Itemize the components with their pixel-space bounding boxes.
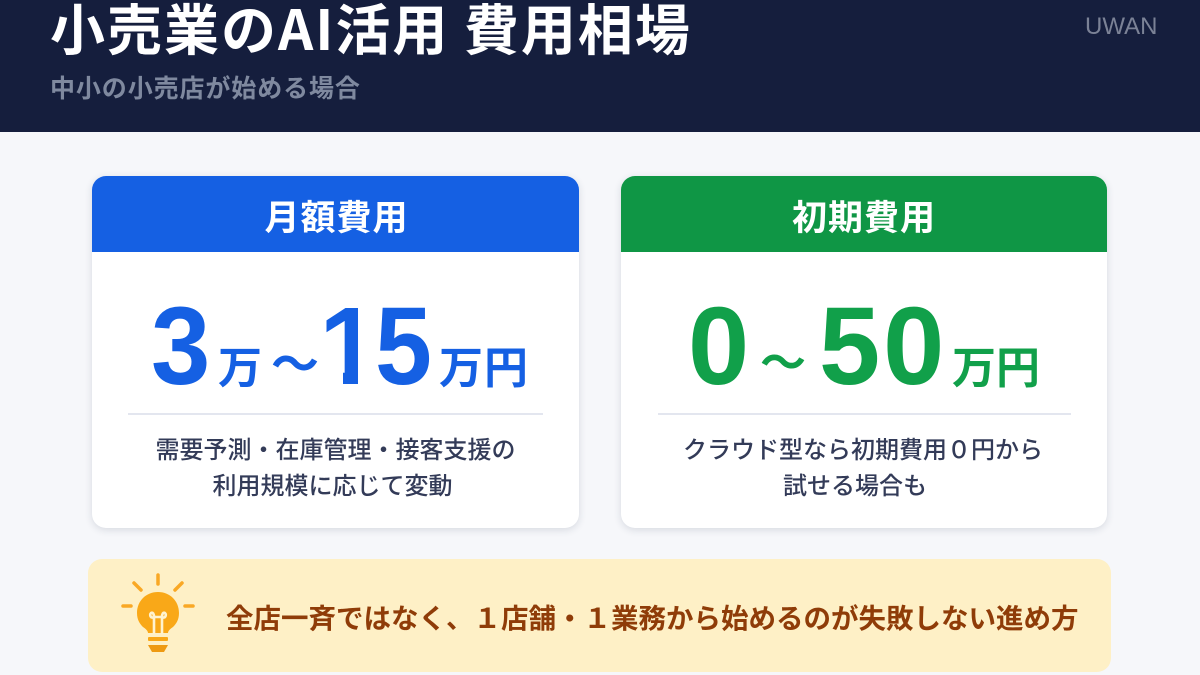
panel: initial cost: [621, 176, 1107, 528]
price range: initial: ～: [760, 327, 807, 393]
price range: initial: [688, 285, 1040, 408]
price range: monthly: ～: [271, 325, 320, 395]
price range: monthly: 1: [319, 285, 380, 408]
brand label: UWAN: [1085, 13, 1157, 40]
price range: monthly: [151, 285, 529, 408]
description: monthly: 利用規模に応じて変動: [212, 466, 452, 501]
price range: monthly: 5: [375, 285, 432, 408]
panel heading: monthly cost: [92, 176, 579, 252]
description: initial: クラウド型なら初期費用０円から: [683, 430, 1043, 465]
price range: monthly: 万円: [439, 332, 529, 396]
icon: light bulb: [121, 573, 195, 652]
subtitle: 中小の小売店が始める場合: [50, 69, 361, 105]
price range: initial: 50: [819, 285, 947, 408]
description: initial: [683, 430, 1043, 501]
callout text: 全店一斉ではなく、１店舗・１業務から始めるのが失敗しない進め方: [226, 596, 1078, 636]
header band: [0, 0, 1200, 132]
description: monthly: 需要予測・在庫管理・接客支援の: [156, 430, 516, 465]
callout: advice: [88, 559, 1111, 672]
price range: monthly: 万: [218, 332, 263, 396]
description: initial: 試せる場合も: [783, 466, 927, 501]
panel: monthly cost: [92, 176, 579, 528]
price range: monthly: 3: [151, 285, 210, 408]
panel heading: initial cost: [621, 176, 1107, 252]
panel heading: monthly cost: 月額費用: [264, 190, 408, 241]
panel heading: initial cost: 初期費用: [792, 190, 936, 241]
price range: initial: 0: [688, 285, 749, 408]
description: monthly: [156, 430, 516, 501]
price range: initial: 万円: [952, 332, 1040, 396]
